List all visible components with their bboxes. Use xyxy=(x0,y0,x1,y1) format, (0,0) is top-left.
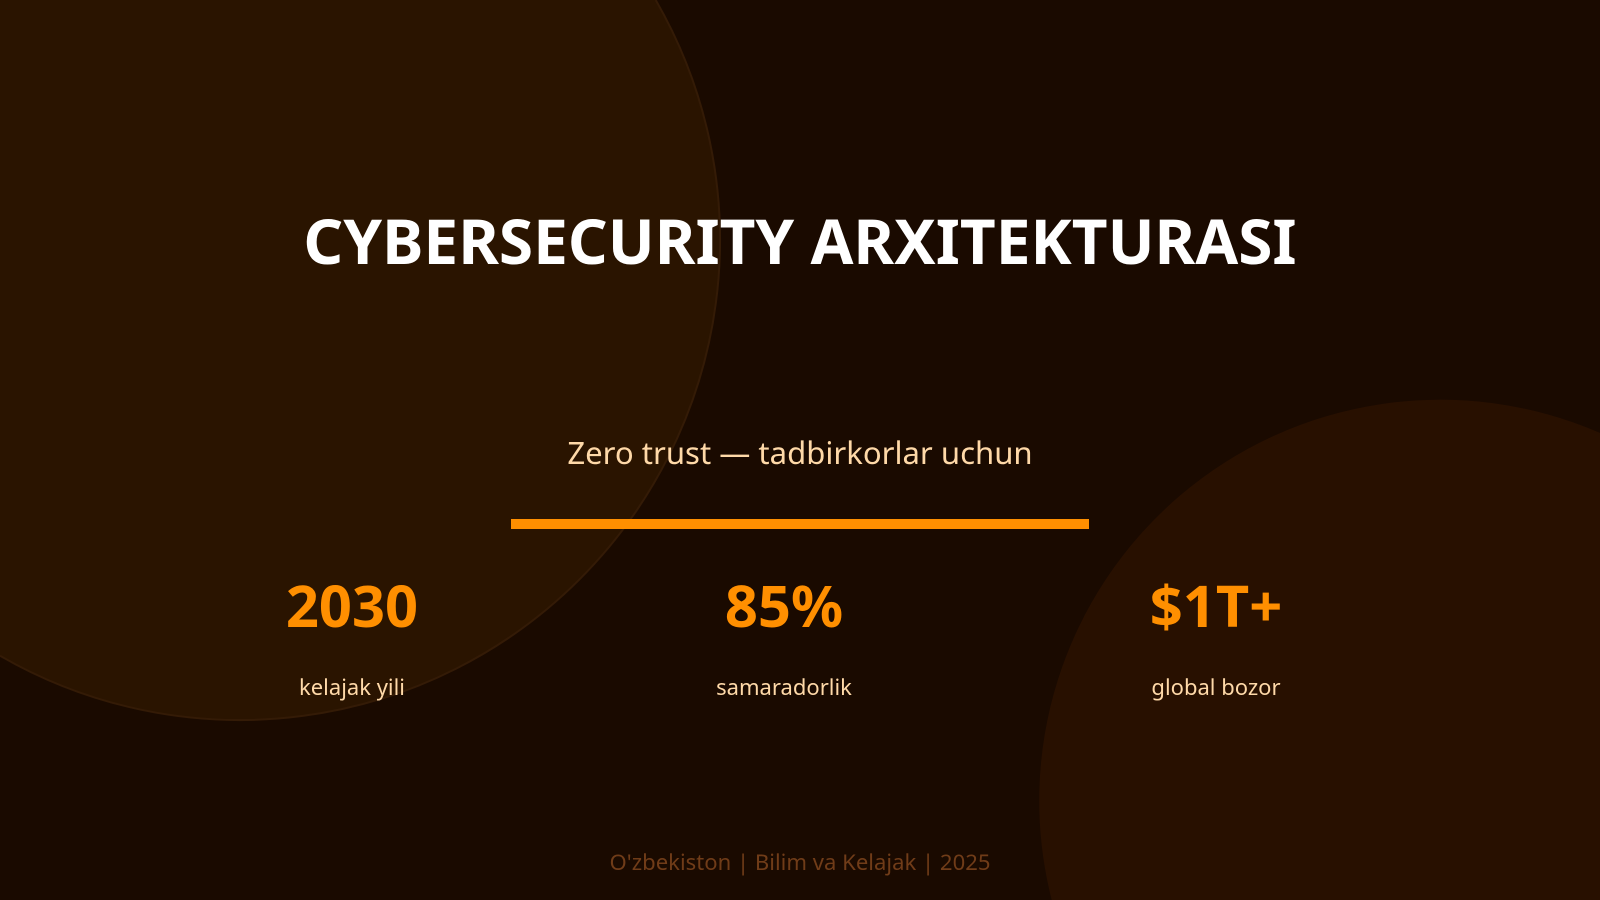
accent bar xyxy=(511,519,1089,529)
stat: 2030 xyxy=(286,565,418,702)
subtitle: Zero trust — tadbirkorlar uchun xyxy=(567,432,1033,474)
footer: O'zbekiston | Bilim va Kelajak | 2025 xyxy=(610,847,990,877)
stat: 85% xyxy=(716,565,852,702)
decorative circle: top left xyxy=(0,0,720,720)
stat value: 2030 xyxy=(286,565,418,644)
stat value: 85% xyxy=(725,565,843,644)
title: CYBERSECURITY ARXITEKTURASI xyxy=(303,199,1297,283)
stat label: global bozor xyxy=(1151,672,1281,702)
stat label: samaradorlik xyxy=(716,672,852,702)
stat label: kelajak yili xyxy=(299,672,405,702)
decorative circle: bottom right xyxy=(1039,400,1600,900)
stat: $1T+ xyxy=(1150,565,1282,702)
stat value: $1T+ xyxy=(1150,565,1282,644)
